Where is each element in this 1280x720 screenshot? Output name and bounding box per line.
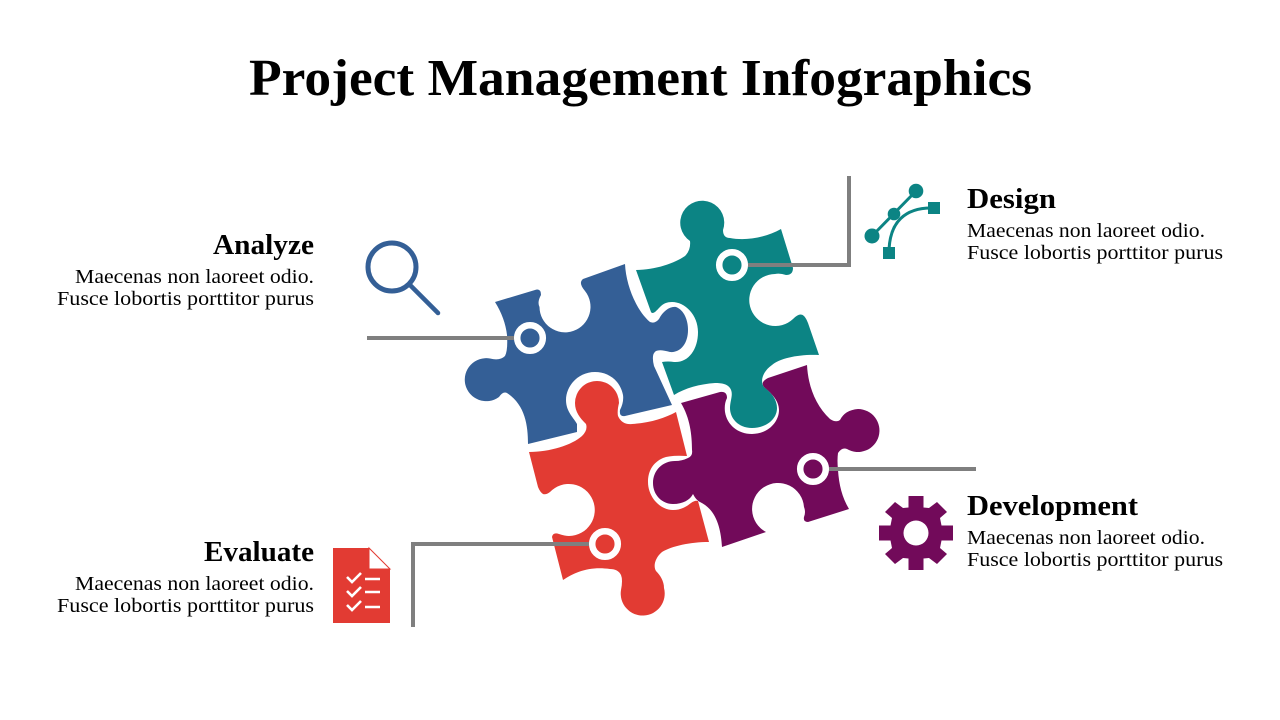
text block: design	[967, 183, 1223, 264]
text block: development	[967, 490, 1223, 571]
text block: analyze	[57, 229, 314, 310]
puzzle: four interlocking pieces	[465, 201, 879, 616]
connector: design	[748, 176, 849, 265]
body: development: Fusce lobortis porttitor purus	[967, 549, 1223, 571]
body: evaluate	[57, 573, 314, 617]
heading: design: Design	[967, 183, 1056, 215]
body: development: Maecenas non laoreet odio.	[967, 527, 1205, 549]
puzzle piece: red	[529, 381, 709, 616]
icon: checklist document	[333, 548, 390, 623]
puzzle piece: purple	[653, 365, 879, 547]
body: evaluate: Maecenas non laoreet odio.	[75, 573, 314, 595]
heading: development: Development	[967, 490, 1138, 522]
ring: blue	[517, 325, 543, 351]
ring: red	[592, 531, 618, 557]
body: analyze: Maecenas non laoreet odio.	[75, 266, 314, 288]
icon: magnifier	[368, 243, 438, 313]
icon: gear	[879, 496, 953, 570]
puzzle piece: blue	[465, 264, 688, 444]
text block: evaluate	[57, 536, 314, 617]
ring: teal	[719, 252, 745, 278]
ring: purple	[800, 456, 826, 482]
body: evaluate: Fusce lobortis porttitor purus	[57, 595, 314, 617]
body: design	[967, 220, 1223, 264]
body: development	[967, 527, 1223, 571]
heading: analyze: Analyze	[213, 229, 314, 261]
body: design: Fusce lobortis porttitor purus	[967, 242, 1223, 264]
body: analyze: Fusce lobortis porttitor purus	[57, 288, 314, 310]
puzzle piece: teal	[636, 201, 819, 428]
title: Project Management Infographics	[249, 50, 1032, 107]
heading: evaluate: Evaluate	[204, 536, 314, 568]
connector: evaluate	[413, 544, 589, 627]
body: analyze	[57, 266, 314, 310]
icon: bezier curve	[864, 184, 940, 259]
connector: analyze	[367, 336, 514, 340]
body: design: Maecenas non laoreet odio.	[967, 220, 1205, 242]
connector: development	[829, 467, 976, 471]
